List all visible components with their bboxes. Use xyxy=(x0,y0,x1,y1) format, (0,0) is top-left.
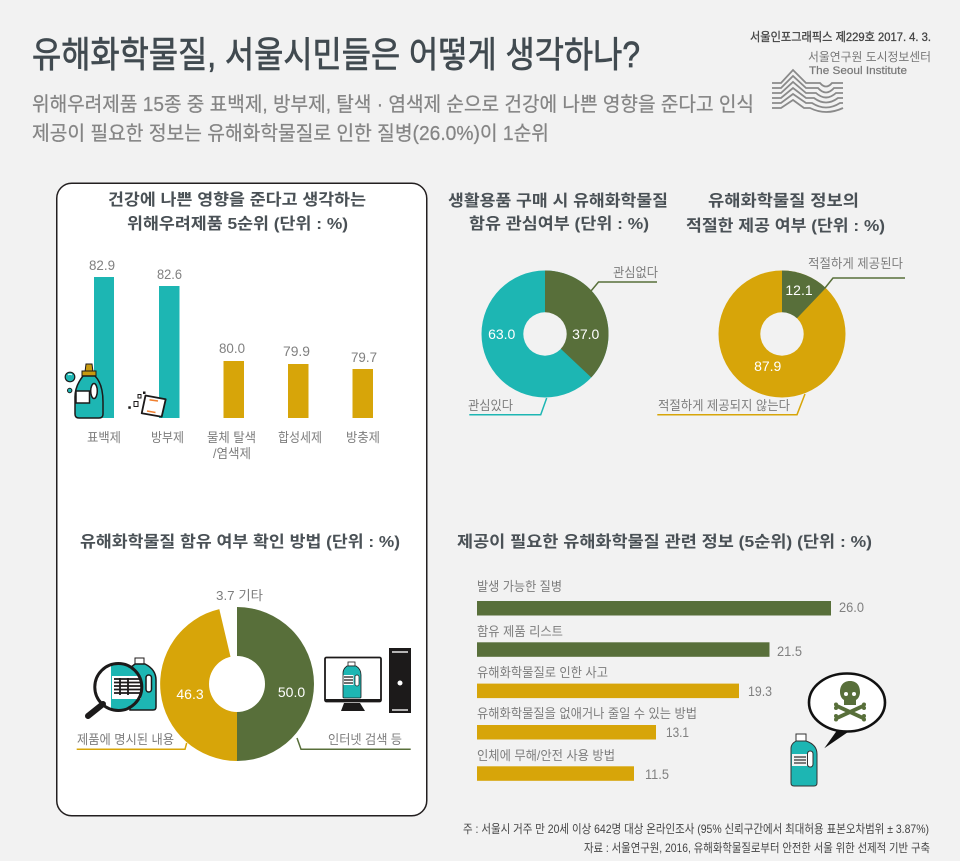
bar chart: information needed: 함유 제품 리스트 xyxy=(477,624,563,639)
bar chart: top five hazardous products: 물체 탈색 xyxy=(207,430,256,445)
bar chart: information needed: 발생 가능한 질병 xyxy=(477,579,562,594)
bar chart: top five hazardous products: 방충제 xyxy=(346,430,380,445)
icon: magnifier over bottle label xyxy=(88,658,156,716)
icon: Seoul Institute logo xyxy=(772,70,843,112)
publisher name: 서울연구원 도시정보센터 xyxy=(808,50,931,64)
publisher name: The Seoul Institute xyxy=(809,65,907,77)
bar chart: top five hazardous products: 80.0 xyxy=(219,340,245,356)
donut chart: purchase interest: 관심없다 xyxy=(613,265,658,280)
icon: preservative packet xyxy=(128,392,166,417)
icon: speech bubble with skull xyxy=(809,674,885,748)
source notes xyxy=(463,822,930,855)
bar chart: information needed: 19.3 xyxy=(748,683,772,699)
heading: verification methods: 유해화학물질 함유 여부 확인 방법 (단위 : %) xyxy=(80,533,400,551)
heading: top five hazardous products: 건강에 나쁜 영향을 준다고 생각하는 xyxy=(108,191,366,209)
donut chart: adequacy of information: 적절하게 제공된다 xyxy=(808,256,903,271)
donut chart: verification methods xyxy=(77,588,411,761)
icon: computer with bottle on screen xyxy=(325,648,411,713)
bar chart: top five hazardous products: 82.9 xyxy=(89,257,115,273)
donut chart: purchase interest: 63.0 xyxy=(488,326,516,342)
icon: hazardous bottle xyxy=(791,734,817,786)
subtitle xyxy=(32,93,754,145)
bar chart: top five hazardous products: 방부제 xyxy=(151,430,184,445)
heading: information needed: 제공이 필요한 유해화학물질 관련 정보 (5순위) (단위 : %) xyxy=(457,533,872,551)
issue information: 서울인포그래픽스 제229호 2017. 4. 3. xyxy=(750,30,931,44)
subtitle: 위해우려제품 15종 중 표백제, 방부제, 탈색 · 염색제 순으로 건강에 나쁜 영향을 준다고 인식 xyxy=(32,93,754,116)
bar chart: top five hazardous products xyxy=(87,257,380,461)
bar chart: information needed: 26.0 xyxy=(839,599,864,615)
bar chart: information needed: 유해화학물질을 없애거나 줄일 수 있는 방법 xyxy=(477,706,697,721)
bar chart: top five hazardous products: 82.6 xyxy=(157,266,182,282)
bar chart: top five hazardous products: 79.9 xyxy=(283,343,310,359)
donut chart: adequacy of information: 87.9 xyxy=(754,358,782,374)
bar chart: information needed: 유해화학물질로 인한 사고 xyxy=(477,665,608,680)
icon: bleach bottle with bubbles xyxy=(65,364,103,418)
donut chart: purchase interest: 37.0 xyxy=(572,326,600,342)
heading: purchase interest xyxy=(448,192,668,233)
donut chart: verification methods: 46.3 xyxy=(176,686,204,702)
donut chart: verification methods: 50.0 xyxy=(278,684,305,700)
bar chart: top five hazardous products: 79.7 xyxy=(351,349,377,365)
heading: top five hazardous products: 위해우려제품 5순위 (단위 : %) xyxy=(127,215,348,233)
donut chart: purchase interest xyxy=(468,265,658,415)
panel: left white panel xyxy=(57,183,427,816)
heading: adequacy of information: 적절한 제공 여부 (단위 : %) xyxy=(686,217,885,235)
heading: adequacy of information xyxy=(686,192,885,235)
heading: top five hazardous products xyxy=(108,191,366,233)
title: 유해화학물질, 서울시민들은 어떻게 생각하나? xyxy=(32,34,640,75)
bar chart: top five hazardous products: 표백제 xyxy=(87,430,121,445)
heading: adequacy of information: 유해화학물질 정보의 xyxy=(708,192,859,210)
heading: purchase interest: 함유 관심여부 (단위 : %) xyxy=(469,215,649,233)
bar chart: information needed: 인체에 무해/안전 사용 방법 xyxy=(477,748,615,763)
donut chart: verification methods: 3.7 기타 xyxy=(216,588,263,603)
bar chart: top five hazardous products: 합성세제 xyxy=(278,430,322,445)
donut chart: verification methods: 인터넷 검색 등 xyxy=(328,732,402,747)
subtitle: 제공이 필요한 정보는 유해화학물질로 인한 질병(26.0%)이 1순위 xyxy=(32,122,549,145)
donut chart: adequacy of information: 12.1 xyxy=(785,282,813,298)
donut chart: adequacy of information: 적절하게 제공되지 않는다 xyxy=(658,398,790,413)
bar chart: information needed xyxy=(477,579,864,782)
donut chart: adequacy of information xyxy=(657,256,905,415)
bar chart: information needed: 21.5 xyxy=(777,643,802,659)
bar chart: information needed: 11.5 xyxy=(645,766,669,782)
heading: purchase interest: 생활용품 구매 시 유해화학물질 xyxy=(448,192,668,210)
donut chart: verification methods: 제품에 명시된 내용 xyxy=(77,732,174,747)
donut chart: purchase interest: 관심있다 xyxy=(468,398,513,413)
bar chart: top five hazardous products: /염색제 xyxy=(213,446,251,461)
bar chart: information needed: 13.1 xyxy=(666,724,689,740)
publisher name xyxy=(808,50,931,77)
